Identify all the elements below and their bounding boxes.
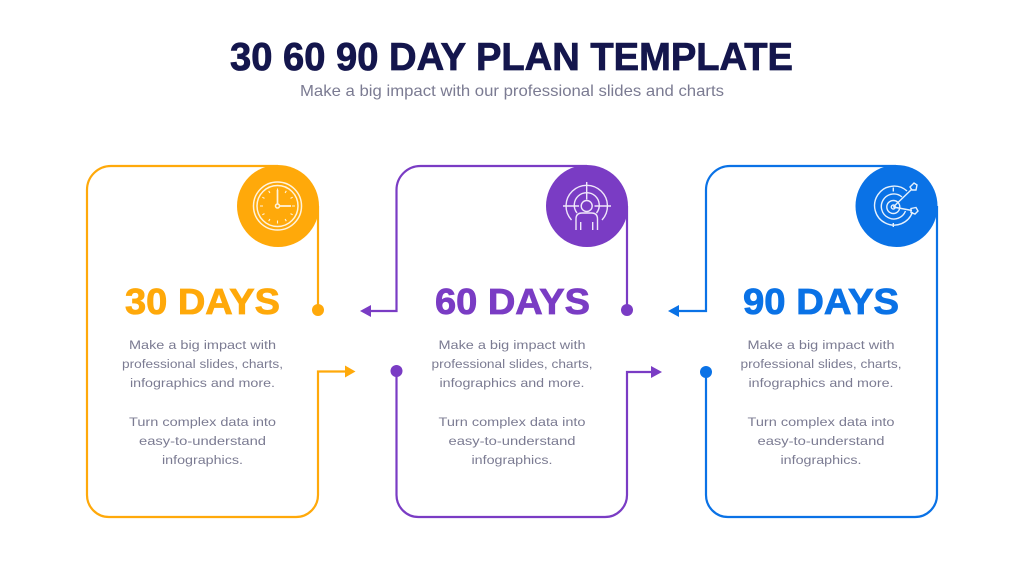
text block: 90 days: infographics and more. [748,376,894,390]
heading: 60 days: 60 DAYS [435,281,590,322]
text block: 30 days [122,338,283,467]
subtitle: Make a big impact with our professional slides and charts [300,83,724,100]
panel: 30 days [87,165,356,517]
icon: clock [237,165,319,247]
text block: 90 days: Turn complex data into [748,415,895,429]
text block: 90 days [740,338,902,467]
text block: 60 days: infographics and more. [440,376,584,390]
connector dot [312,304,324,316]
connector dots [390,304,633,377]
text block: 60 days: Turn complex data into [438,415,586,429]
text block: 90 days: easy-to-understand [758,434,885,448]
text block: 30 days: professional slides, charts, [122,357,283,371]
panel: 90 days [668,165,938,517]
text block: 60 days [432,338,592,467]
connector dot [700,366,712,378]
arrow: to 60 days [345,366,356,378]
title: 30 60 90 DAY PLAN TEMPLATE [230,36,793,79]
icon: target with arrows [856,165,938,247]
text block: 30 days: infographics and more. [130,376,275,390]
arrow: back to 30 days [360,305,371,317]
icon: person in crosshair [546,165,628,247]
text block: 60 days: professional slides, charts, [432,357,592,371]
text block: 90 days: infographics. [780,453,862,467]
arrow: to 90 days [651,366,662,378]
text block: 60 days: Make a big impact with [438,338,586,352]
panel: 60 days [360,165,662,517]
card outline: 90 days [677,166,937,517]
card outline: 30 days [87,166,346,517]
text block: 30 days: Turn complex data into [129,415,276,429]
heading: 90 days: 90 DAYS [743,281,899,322]
text block: 60 days: easy-to-understand [448,434,576,448]
text block: 90 days: professional slides, charts, [740,357,902,371]
text block: 30 days: infographics. [162,453,243,467]
text block: 60 days: infographics. [472,453,552,467]
text block: 90 days: Make a big impact with [748,338,895,352]
heading: 30 days: 30 DAYS [125,281,280,322]
text block: 30 days: easy-to-understand [139,434,266,448]
text block: 30 days: Make a big impact with [129,338,276,352]
arrow: back to 60 days [668,305,679,317]
card outline: 60 days [368,166,653,517]
